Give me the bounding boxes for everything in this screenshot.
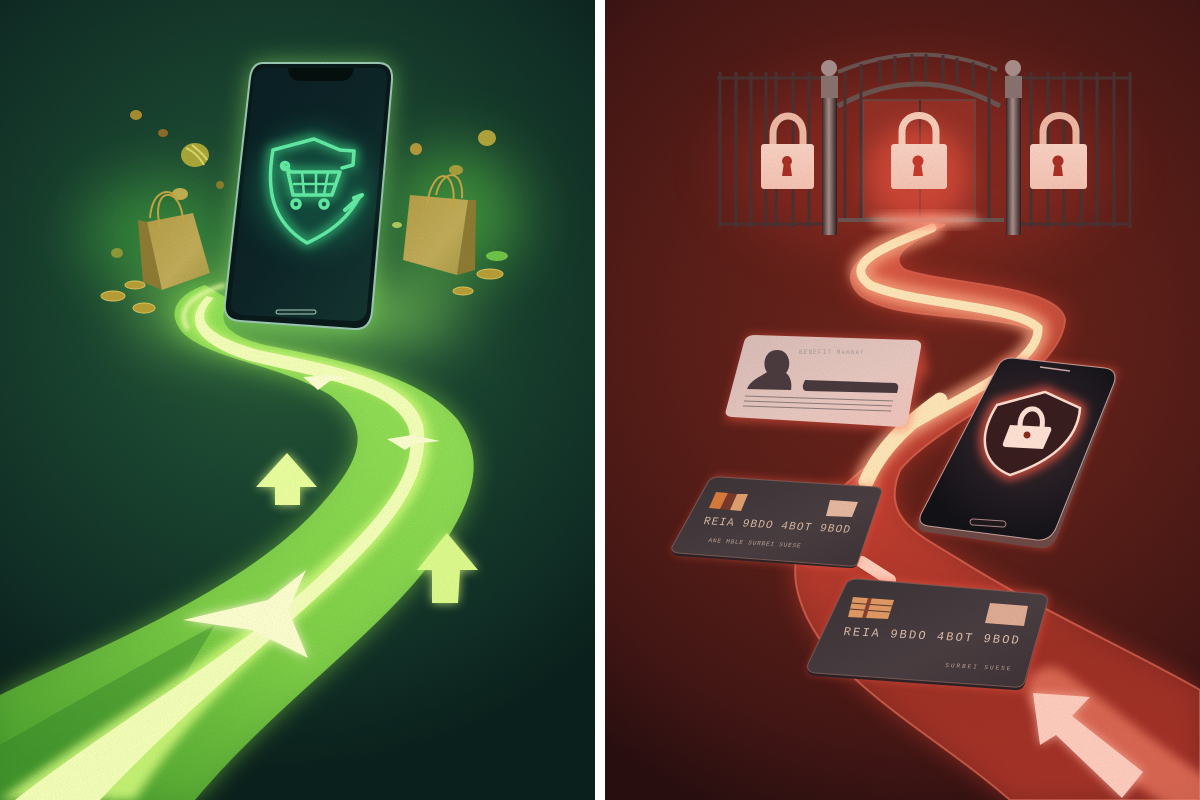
arrow: small up arrow [256,453,317,505]
icon: glowing shield [985,392,1080,475]
arrow: up arrow on path edge [417,533,478,603]
icon: glow under gate [870,214,980,226]
phone screen [231,68,387,321]
gate backlight glow [730,75,1110,255]
divider repaint [595,0,605,800]
icon: right shopping bag [403,175,476,275]
icon: smartphone with shield [225,63,392,329]
panel background [0,0,595,800]
phone speaker [1040,367,1070,371]
arrow: chevron marker upper [303,375,352,390]
icon: glow halo on screen [251,128,375,252]
icon: gate panel and arches [838,54,1004,220]
glowing arc under phone [184,285,225,330]
icon: centre padlock [891,116,947,189]
card number: REIA 9BDO 4BOT 9BOD [702,516,852,537]
secondary darker lane [0,625,215,800]
card stripes [848,597,894,619]
id card name bar [803,380,898,393]
icon: left padlock [761,116,814,189]
bright centre line of path [0,295,430,800]
icon: shield outline with cart [270,139,362,243]
credit card: upper [672,477,882,568]
id card [725,335,928,430]
icon: right fence [1020,72,1132,228]
glowing red path lower band [795,225,1200,800]
icon: gate posts [821,60,1022,235]
panel: open green path [0,0,595,800]
panel: locked red path [605,0,1200,800]
id card header text: BENEFIT Member [799,349,864,356]
id card portrait [747,350,791,390]
icon: centre padlock glow [868,125,968,225]
card number: REIA 9BDO 4BOT 9BOD [842,625,1020,648]
arrow: large direction arrow on path [183,570,308,658]
red panel background [605,0,1200,800]
card panel [985,603,1028,626]
icon: left shopping bag [138,192,210,290]
credit card: lower [808,579,1048,690]
arrow: chevron marker lower [387,435,440,450]
card small print: SURBEI SUESE [945,662,1011,672]
glowing wide path band [0,285,474,800]
id card lines [743,396,893,411]
card stripes [709,492,748,511]
bright centre of red path [861,228,1200,800]
icon: right padlock [1030,116,1087,189]
smartphone with lock shield [918,358,1117,548]
icon: phone padlock [1003,409,1051,449]
icon: left fence [717,72,822,228]
arrow: red path arrow [1033,693,1143,798]
icon: gold coins [101,269,503,313]
green glow behind phone [85,150,520,343]
phone home bar [276,310,316,314]
icon: flying gold pieces [111,110,508,261]
card chip [826,500,858,517]
divider between panels [595,0,605,800]
phone notch [288,68,354,81]
card small print: ANE MBLE SURBEI SUESE [707,537,802,549]
phone home button [970,519,1006,527]
